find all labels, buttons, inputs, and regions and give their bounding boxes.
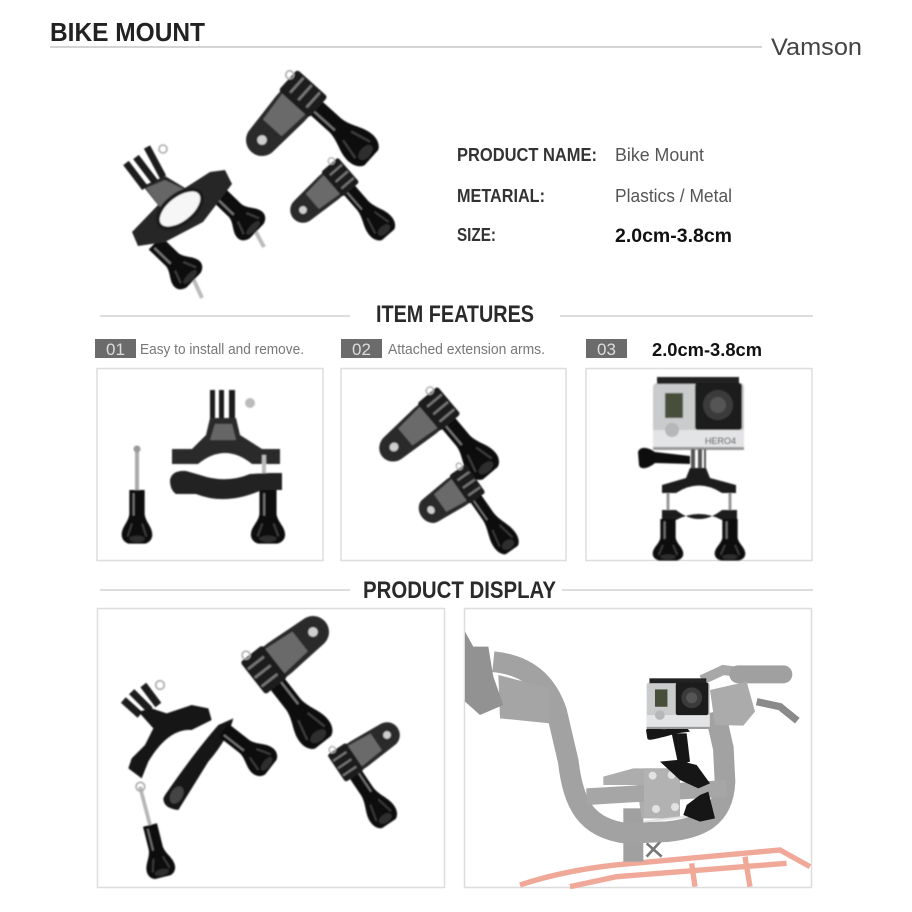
part: short arm	[408, 459, 522, 581]
feature label 01	[95, 339, 304, 359]
part: handlebar clamp	[126, 145, 269, 298]
spec label: size: SIZE:	[457, 225, 496, 245]
part: camera	[653, 377, 744, 450]
feature label 03	[586, 339, 762, 360]
feature label 03: 2.0cm-3.8cm	[652, 340, 762, 360]
spec value: size: 2.0cm-3.8cm	[615, 226, 732, 247]
heading: item features: ITEM FEATURES	[376, 301, 534, 328]
feature label 02	[341, 339, 545, 359]
bike: mount on handlebar	[646, 728, 715, 822]
panel: mount installed on bicycle	[464, 608, 812, 888]
bike: basket	[520, 850, 810, 887]
brand name: Vamson	[771, 34, 862, 61]
panel: feature 03 camera on mount	[586, 368, 812, 561]
spec table	[457, 145, 732, 247]
spec label: material: METARIAL:	[457, 186, 545, 206]
panel: product display parts photo	[98, 601, 444, 888]
feature label 01: 01	[106, 340, 125, 359]
bike: handlebar	[465, 632, 797, 862]
panel: feature 01 disassembled clamp	[97, 368, 323, 560]
part: long arm	[235, 601, 383, 753]
part: long extension arm	[231, 64, 383, 214]
feature label 02: 02	[352, 340, 371, 359]
part: short arm	[323, 710, 439, 832]
feature label 01: Easy to install and remove.	[140, 341, 304, 358]
bike: camera	[647, 678, 710, 729]
heading: product display: PRODUCT DISPLAY	[363, 577, 556, 604]
camera model label: HERO4	[705, 436, 736, 446]
part: screw	[122, 446, 152, 544]
part: upper clamp half	[172, 390, 280, 464]
panel: feature 02 extension arms	[341, 368, 566, 581]
title: Bike Mount: BIKE MOUNT	[50, 17, 205, 47]
part: open clamp and screw	[123, 681, 281, 880]
part: short extension arm	[279, 153, 399, 275]
spec value: material: Plastics / Metal	[615, 186, 732, 206]
product photo: mount parts	[126, 64, 399, 298]
feature label 03: 03	[597, 340, 616, 359]
feature label 02: Attached extension arms.	[388, 341, 545, 358]
part: long arm	[367, 381, 503, 520]
spec value: product name: Bike Mount	[615, 145, 704, 165]
spec label: product name: PRODUCT NAME:	[457, 145, 597, 165]
part: mount assembly	[638, 448, 745, 561]
part: lower clamp half with knob	[170, 455, 285, 544]
